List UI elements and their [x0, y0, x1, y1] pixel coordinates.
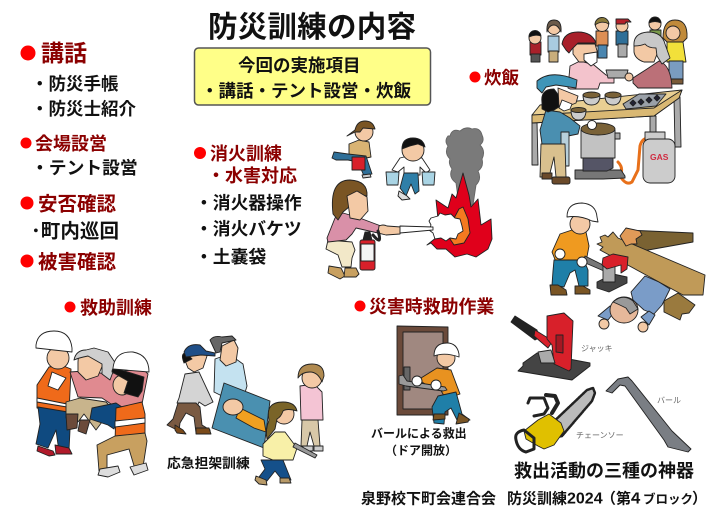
front bearer with cap — [167, 345, 215, 434]
illustration: emergency stretcher drill — [167, 336, 324, 485]
panel: lecture list — [20, 40, 136, 119]
footer: ブロック — [643, 492, 693, 506]
panel: venue setup — [20, 134, 138, 178]
title: 防災訓練の内容 — [208, 11, 416, 44]
rescuer two — [90, 352, 149, 477]
girl with bucket — [332, 121, 375, 178]
heading: rice cooking: 炊飯 — [484, 68, 519, 88]
illustration: crowbar — [606, 377, 691, 452]
caption: three sacred tools: 救出活動の三種の神器 — [514, 461, 694, 481]
patient on stretcher — [223, 399, 266, 432]
extinguisher spray — [429, 213, 463, 241]
door — [397, 326, 448, 415]
worker with helmet — [550, 203, 613, 295]
caption: crowbar rescue: （ドア開放） — [385, 442, 457, 458]
icon: small crowd — [529, 17, 687, 84]
panel: fire drill list: ・水害対応 — [207, 166, 297, 186]
illustration: chainsaw — [516, 388, 595, 452]
callout: items this time: ・講話・テント設営・炊飯 — [201, 81, 411, 101]
broken beams — [597, 228, 705, 295]
footer: ４ — [628, 490, 643, 508]
heading: disaster rescue work: 災害時救助作業 — [369, 297, 494, 317]
icon: server with red bandana — [562, 32, 614, 89]
table with bowls and tray — [532, 90, 682, 165]
panel: fire drill list: ・消火器操作 — [195, 193, 302, 213]
elderly woman — [66, 348, 148, 434]
girl in yellow front — [255, 402, 317, 485]
rescuer one — [36, 331, 72, 456]
icon: pot on stove — [575, 123, 625, 179]
panel: safety check: ･町内巡回 — [31, 220, 119, 242]
flames — [427, 173, 492, 257]
callout: items this time — [194, 48, 430, 105]
panel: lecture list: ・防災手帳 — [31, 74, 119, 94]
icon: gas cylinder and hose: GAS — [650, 152, 669, 162]
caption: crowbar rescue: バールによる救出 — [371, 426, 467, 440]
panel: damage check: 被害確認 — [38, 252, 117, 274]
illustration: worker with jack lifting beam over victim — [550, 203, 705, 332]
woman with extinguisher — [326, 180, 433, 279]
panel: safety check — [20, 194, 119, 242]
panel: safety check: 安否確認 — [38, 194, 117, 216]
panel: fire drill list — [194, 144, 302, 267]
panel: fire drill list: ・土嚢袋 — [195, 247, 266, 267]
heading: rescue training: 救助訓練 — [80, 298, 152, 318]
panel: lecture list: 講話 — [41, 40, 87, 66]
victim under beam — [598, 276, 695, 332]
illustration: rice cooking scene — [529, 17, 687, 184]
footer: 泉野校下町会連合会 — [361, 490, 496, 508]
footer: 防災訓練 — [507, 490, 567, 508]
label: crowbar: バール — [657, 396, 681, 405]
footer: 2024 — [567, 490, 603, 508]
caption: crowbar rescue — [371, 426, 467, 458]
panel: fire drill list: ・消火バケツ — [195, 219, 302, 239]
panel: fire drill list: 消火訓練 — [210, 144, 282, 164]
icon: gas cylinder and hose — [618, 132, 675, 183]
illustration: carrying elderly person — [36, 331, 149, 477]
illustration: fire extinguisher drill — [326, 121, 492, 279]
label: jack: ジャッキ — [581, 344, 613, 353]
girl in pink — [298, 364, 324, 451]
footer: （第 — [601, 490, 631, 508]
illustration: door opening with crowbar — [397, 326, 470, 424]
panel: venue setup: 会場設営 — [35, 134, 107, 154]
jack in use — [597, 254, 628, 292]
boy with buckets — [386, 138, 435, 200]
worker forcing door — [399, 343, 470, 424]
label: chainsaw: チェーンソー — [576, 431, 624, 440]
back bearer — [210, 336, 247, 396]
panel: lecture list: ・防災士紹介 — [31, 99, 136, 119]
caption: emergency stretcher training: 応急担架訓練 — [167, 455, 250, 471]
icon: old woman with bowl — [606, 32, 672, 88]
footer — [361, 490, 707, 508]
callout: items this time: 今回の実施項目 — [238, 56, 360, 76]
illustration: jack tool — [511, 313, 590, 380]
stretcher — [212, 383, 270, 448]
footer: ） — [692, 490, 707, 508]
smoke — [446, 128, 484, 205]
panel: venue setup: ・テント設営 — [31, 158, 138, 178]
icon: cook with blue bandana — [537, 75, 596, 184]
